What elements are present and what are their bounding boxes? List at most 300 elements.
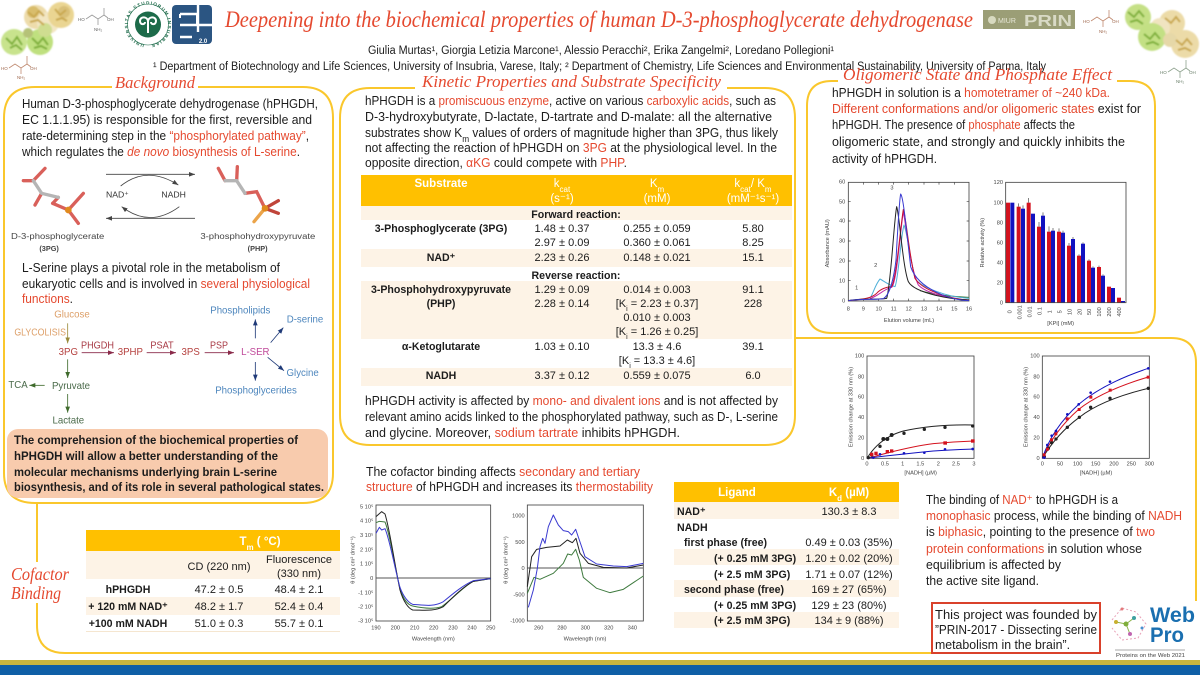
chart: elution profile: 9	[862, 306, 865, 312]
table: ligand dissociation constants: 134 ± 9 (88%)	[814, 615, 884, 627]
table header: (s⁻¹)	[550, 193, 574, 205]
chart: NADH low concentration: 60	[858, 395, 864, 401]
chart: far UV CD: 220	[429, 625, 438, 631]
panel: kinetic properties	[340, 72, 795, 445]
labels: reaction: NAD⁺	[106, 189, 129, 199]
text block: oligomeric state: Different conformations and/or oligomeric states exist for	[832, 101, 1142, 116]
chart: phosphate inhibition bars: 10	[1068, 309, 1074, 315]
chart: phosphate inhibition bars: Relative activity (%)	[980, 218, 986, 268]
chart: elution profile: 30	[839, 239, 845, 245]
text block: NAD and NADH binding: The binding of NAD⁺ to hPHGDH is a	[926, 492, 1119, 507]
chart: near UV CD	[504, 505, 643, 642]
table forward reaction: 5.80	[742, 223, 764, 235]
pathway: serine synthesis: 3PHP	[118, 347, 143, 358]
text block: NAD and NADH binding: monophasic process, while the binding of NADH	[926, 508, 1182, 523]
pathway: serine fates: Glycine	[287, 368, 319, 379]
diagram: metabolic pathway	[8, 305, 323, 426]
labels: reaction: D-3-phosphoglycerate	[11, 231, 105, 241]
table forward reaction: 0.255 ± 0.059	[623, 223, 691, 235]
callout: comprehension	[7, 429, 328, 498]
chart: far UV CD: 5 10⁵	[360, 503, 373, 510]
chart: phosphate inhibition bars: 20	[1078, 309, 1084, 315]
table reverse reaction: [Ki = 13.3 ± 4.6]	[619, 355, 695, 370]
chart: NADH low concentration: 2.5	[952, 462, 960, 468]
chart: elution profile	[825, 180, 972, 324]
table header: (mM⁻¹s⁻¹)	[727, 193, 779, 205]
text block: activity effects: hPHGDH activity is affected by mono- and divalent ions and is not affected by	[365, 393, 778, 408]
table forward reaction	[375, 209, 764, 264]
chart: NADH high concentration: 150	[1091, 462, 1100, 468]
panel outline: background	[4, 87, 333, 503]
charts: elution and phosphate activity	[825, 180, 1126, 327]
panel outline: cofactor	[37, 338, 1196, 653]
icon: serine molecule lower left: NH₂	[17, 75, 25, 80]
panel outline: kinetic	[340, 88, 795, 445]
chart: near UV CD: 1000	[512, 514, 525, 520]
chart: phosphate inhibition bars: 100	[1097, 307, 1103, 317]
chart: elution profile: Elution volume (mL)	[884, 318, 934, 324]
icon: serine molecule top left	[78, 8, 114, 32]
text block: NAD and NADH binding: equilibrium is affected by	[926, 557, 1061, 572]
table: melting temperatures: 47.2 ± 0.5	[195, 584, 243, 596]
pathway: pyruvate branch: Pyruvate	[52, 381, 90, 392]
chart: phosphate inhibition bars: 5	[1058, 310, 1064, 313]
table reverse reaction: 39.1	[742, 341, 764, 353]
table header: kcat/ Km	[734, 178, 772, 194]
table reverse reaction: Reverse reaction:	[532, 270, 620, 282]
table forward reaction: 8.25	[742, 237, 764, 249]
chart: far UV CD: 250	[486, 625, 495, 631]
icon: serine molecule lower right: OH	[1189, 70, 1196, 75]
pathway: pyruvate branch	[8, 359, 90, 426]
chart: NADH high concentration: 100	[1073, 462, 1082, 468]
chart: NADH low concentration: 0	[865, 462, 869, 468]
logo: Insubria university seal: UNIVERSITAS STUDIORUM INSUBRIAE	[124, 1, 172, 48]
chart: phosphate inhibition bars: 60	[997, 240, 1003, 246]
title: Deepening into the biochemical properties of human D-3-phosphoglycerate dehydrogenase	[224, 7, 973, 32]
pathway: glycolysis	[14, 309, 90, 343]
chart: NADH low concentration: 20	[858, 436, 864, 442]
chart: elution profile: 50	[839, 199, 845, 205]
logo: MIUR PRIN: PRIN	[1024, 13, 1072, 30]
table reverse reaction	[371, 270, 764, 382]
table reverse reaction: [Ki = 1.26 ± 0.25]	[616, 326, 698, 340]
pathway: pyruvate branch: Lactate	[52, 415, 84, 426]
chart: NADH low concentration: 40	[858, 415, 864, 421]
wordmark	[1115, 604, 1195, 659]
pathway: serine synthesis: PSP	[210, 341, 228, 352]
table header: Substrate	[414, 178, 468, 190]
table reverse reaction: 1.03 ± 0.10	[535, 341, 589, 353]
table: kinetic parameters	[361, 175, 792, 386]
text block: NAD and NADH binding: the active site ligand.	[926, 573, 1039, 588]
table: ligand dissociation constants: (+ 2.5 mM 3PG)	[714, 569, 790, 581]
table: melting temperatures: 51.0 ± 0.3	[195, 618, 243, 630]
table: melting temperatures: 55.7 ± 0.1	[275, 618, 323, 630]
chart: elution profile: 0	[842, 298, 845, 304]
chart: phosphate inhibition bars: 40	[997, 260, 1003, 266]
chart: elution profile: 10	[839, 278, 845, 284]
table: ligand dissociation constants: NADH	[677, 522, 708, 534]
icon: serine molecule top right: HO	[1083, 19, 1090, 24]
text block: oligomeric state: hPHGDH. The presence of phosphate affects the	[832, 117, 1075, 132]
chart: phosphate inhibition bars: 80	[997, 220, 1003, 226]
chart: NADH low concentration: 80	[858, 374, 864, 380]
chart: phosphate inhibition bars: 20	[997, 280, 1003, 286]
text block: NAD and NADH binding	[926, 492, 1182, 588]
chart: far UV CD: Wavelength (nm)	[412, 636, 455, 642]
chart: far UV CD: 2 10⁵	[360, 546, 373, 553]
text block: hPHGDH introduction: Human D-3-phosphoglycerate dehydrogenase (hPHGDH,	[22, 96, 318, 111]
chart: elution profile: 2	[874, 263, 877, 269]
chart: elution profile: 15	[951, 306, 957, 312]
text block: substrate promiscuity	[365, 93, 778, 170]
chart: NADH low concentration: 2	[937, 462, 940, 468]
chart: near UV CD: -1000	[510, 619, 525, 625]
text block: secondary and tertiary structure	[366, 464, 653, 494]
panel: cofactor binding	[11, 338, 1196, 653]
table: melting temperatures: CD (220 nm)	[188, 561, 250, 573]
text block: substrate promiscuity: opposite direction, αKG could compete with PHP.	[365, 155, 627, 170]
table: ligand dissociation constants: (+ 0.25 mM 3PG)	[714, 553, 796, 565]
chart: phosphate inhibition bars: 0	[1000, 300, 1003, 306]
chart: far UV CD: -3 10⁵	[358, 618, 373, 625]
text block: hPHGDH introduction	[21, 96, 318, 159]
chart: NADH high concentration: 20	[1033, 436, 1040, 442]
chart: phosphate inhibition bars: 100	[994, 200, 1003, 206]
heading: cofactor binding: Cofactor	[11, 564, 70, 584]
charts: circular dichroism	[351, 503, 643, 642]
chart: elution profile: 40	[839, 219, 845, 225]
logo: Web Pro	[1112, 604, 1195, 659]
callout: funding: ”PRIN-2017 - Dissecting serine	[935, 622, 1097, 637]
chart: near UV CD: 500	[515, 540, 525, 546]
table: ligand dissociation constants: 169 ± 27 (65%)	[811, 584, 887, 596]
panel outline: oligomeric	[807, 81, 1155, 333]
table: ligand dissociation constants: 0.49 ± 0.03 (35%)	[805, 537, 893, 549]
chart: far UV CD: 230	[448, 625, 458, 631]
chart: NADH high concentration: Emission change at 330 nm (%)	[1024, 367, 1030, 447]
chart: far UV CD: 3 10⁵	[360, 532, 373, 539]
text block: hPHGDH introduction: rate-determining step in the “phosphorylated pathway”,	[22, 128, 309, 143]
chart: near UV CD: -500	[513, 592, 525, 598]
affiliations: ¹ Department of Biotechnology and Life Sciences, University of Insubria, Varese, Italy; ² Department of Chemistry, Life Sciences and Environmental Sustainability, University of Parma, Italy	[153, 61, 1046, 73]
diagram: 3PG to PHP reaction	[11, 167, 316, 253]
table: melting temperatures: Fluorescence	[266, 554, 332, 566]
chart: NADH high concentration: 250	[1127, 462, 1136, 468]
text block: oligomeric state: activity of hPHGDH.	[832, 151, 937, 166]
chart: elution profile: 3	[890, 185, 894, 191]
chart: NADH high concentration: [NADH] (µM)	[1080, 471, 1112, 477]
chart: NADH high concentration: 300	[1145, 462, 1154, 468]
heading: kinetic properties: Kinetic Properties and Substrate Specificity	[421, 72, 721, 91]
chart: NADH low concentration	[848, 354, 976, 477]
wordmark: Proteins on the Web 2021	[1116, 653, 1185, 659]
table reverse reaction: 0.010 ± 0.003	[623, 312, 691, 324]
pathway: glycolysis: GLYCOLISIS	[14, 328, 66, 339]
text block: oligomeric state: oligomeric state, and strongly and quickly inhibits the	[832, 134, 1125, 149]
wordmark: Web	[1150, 604, 1195, 627]
chart: NADH high concentration: 0	[1037, 456, 1040, 462]
pathway: glycolysis: Glucose	[54, 309, 90, 320]
chart: phosphate inhibition bars: 0	[1008, 310, 1014, 313]
pathway: serine synthesis: PSAT	[150, 341, 174, 352]
chart: elution profile: 16	[966, 306, 972, 312]
chart: NADH low concentration: 1	[901, 462, 904, 468]
chart: far UV CD: θ (deg cm² dmol⁻¹)	[351, 536, 357, 584]
chart: elution profile: 12	[906, 306, 912, 312]
table forward reaction: 2.23 ± 0.26	[535, 252, 589, 264]
chart: far UV CD: 0	[370, 576, 373, 582]
text block: L-serine role: functions.	[22, 291, 73, 306]
table: ligand dissociation constants: 1.71 ± 0.07 (12%)	[805, 569, 893, 581]
icon: serine molecule lower left: OH	[30, 66, 37, 71]
chart: phosphate inhibition bars: 120	[994, 180, 1003, 186]
table: melting temperatures: 48.2 ± 1.7	[195, 601, 243, 613]
table: ligand dissociation constants: Kd (µM)	[829, 487, 869, 502]
chart: phosphate inhibition bars: [KPi] (mM)	[1047, 321, 1074, 327]
labels: reaction: (PHP)	[248, 244, 268, 253]
pathway: pyruvate branch: TCA	[8, 380, 28, 391]
table forward reaction: 2.97 ± 0.09	[535, 237, 589, 249]
chart: NADH high concentration: 200	[1109, 462, 1119, 468]
chart: phosphate inhibition bars: 50	[1087, 309, 1093, 315]
icon: serine molecule top right: OH	[1112, 19, 1119, 24]
chart: near UV CD: 260	[534, 625, 543, 631]
panel: background	[4, 73, 333, 503]
table reverse reaction: [Ki = 2.23 ± 0.37]	[616, 298, 698, 312]
callout: comprehension: hPHGDH will allow a better understanding of the	[14, 449, 278, 463]
chart: elution profile: 60	[839, 180, 845, 186]
chart: near UV CD: Wavelength (nm)	[564, 636, 607, 642]
text block: secondary and tertiary structure: The cofactor binding affects secondary and tertiary	[366, 464, 640, 479]
table forward reaction: 3-Phosphoglycerate (3PG)	[375, 223, 507, 235]
table: melting temperatures: +100 mM NADH	[89, 618, 167, 630]
table: ligand dissociation constants: second phase (free)	[684, 584, 784, 596]
chart: NADH high concentration: 0	[1041, 462, 1044, 468]
footer band	[0, 660, 1200, 675]
chart: near UV CD: θ (deg cm² dmol⁻¹)	[504, 536, 510, 584]
chart: far UV CD: 240	[467, 625, 477, 631]
table: melting temperatures: + 120 mM NAD⁺	[88, 601, 168, 613]
table: ligand dissociation constants: (+ 2.5 mM 3PG)	[714, 615, 790, 627]
chart: NADH low concentration: 0	[861, 456, 864, 462]
logo: MIUR PRIN	[983, 10, 1075, 30]
callout: funding: This project was founded by	[935, 607, 1098, 622]
table reverse reaction: (PHP)	[427, 298, 455, 310]
text block: L-serine role	[22, 260, 310, 306]
chart: NADH low concentration: 1.5	[916, 462, 924, 468]
text block: substrate promiscuity: hPHGDH is a promiscuous enzyme, active on various carboxylic acids, such as	[365, 93, 776, 108]
chart: elution profile: Absorbance (mAU)	[825, 219, 831, 267]
chart: phosphate inhibition bars: 200	[1107, 307, 1113, 317]
pathway: serine synthesis: 3PG	[59, 347, 78, 358]
table: ligand dissociation constants: 129 ± 23 (80%)	[811, 600, 887, 612]
table reverse reaction: 228	[744, 298, 762, 310]
callout: comprehension: The comprehension of the biochemical properties of	[14, 433, 299, 447]
callout: funding: metabolism in the brain”.	[935, 637, 1070, 652]
text block: hPHGDH introduction: EC 1.1.1.95) is responsible for the first, reversible and	[22, 112, 312, 127]
table forward reaction: NAD⁺	[427, 252, 456, 264]
icon: protein structure top left	[1, 2, 74, 55]
chart: NADH low concentration: Emission change at 330 nm (%)	[848, 367, 854, 447]
wordmark: Pro	[1150, 624, 1184, 647]
table header: kcat	[554, 178, 571, 194]
table reverse reaction: 2.28 ± 0.14	[535, 298, 589, 310]
table: ligand dissociation constants: (+ 0.25 mM 3PG)	[714, 600, 796, 612]
icon: serine molecule lower right: HO	[1160, 70, 1167, 75]
chart: NADH high concentration: 80	[1033, 374, 1040, 380]
text block: activity effects: relevant amino acids linked to the phosphorylated pathway, such as D-, L-serine	[365, 409, 778, 424]
chart: NADH high concentration: 100	[1030, 354, 1040, 360]
panel: oligomeric state	[807, 65, 1155, 333]
table: melting temperatures: Tm ( °C)	[239, 536, 281, 552]
chart: elution profile: 14	[936, 306, 942, 312]
chart: phosphate inhibition bars: 0.01	[1028, 306, 1034, 317]
text block: substrate promiscuity: not affecting the reaction of hPHGDH on 3PG at the physiological level. In the	[365, 140, 777, 155]
callout: comprehension: molecular mechanisms underlying brain L-serine	[14, 465, 277, 479]
text block: oligomeric state	[832, 85, 1142, 166]
chart: phosphate inhibition bars: 1	[1048, 310, 1054, 313]
chart: far UV CD	[351, 503, 495, 642]
table: ligand dissociation constants: 1.20 ± 0.02 (20%)	[805, 553, 893, 565]
table reverse reaction: 3-Phosphohydroxypyruvate	[371, 284, 511, 296]
chart: NADH high concentration: 40	[1033, 415, 1040, 421]
icon: serine molecule top right: NH₂	[1099, 29, 1107, 34]
pathway: serine fates: Phosphoglycerides	[215, 385, 297, 396]
chart: NADH high concentration	[1024, 354, 1154, 477]
chart: NADH high concentration: 50	[1057, 462, 1063, 468]
logo: MIUR PRIN: MIUR	[998, 18, 1016, 25]
table reverse reaction: 1.29 ± 0.09	[535, 284, 589, 296]
table: ligand dissociation constants	[674, 482, 899, 628]
chart: elution profile: 13	[921, 306, 927, 312]
text block: substrate promiscuity: D-3-hydroxybutyrate, D-lactate, D-tartrate and D-malate: all the alternative	[365, 109, 772, 124]
table rows	[361, 175, 792, 386]
icon: serine molecule top left: NH₂	[94, 27, 102, 32]
table reverse reaction: 0.559 ± 0.075	[623, 370, 691, 382]
labels: reaction: 3-phosphohydroxypyruvate	[200, 231, 316, 241]
chart: elution profile: 20	[839, 259, 845, 265]
table reverse reaction: 13.3 ± 4.6	[633, 341, 681, 353]
table: ligand dissociation constants: first phase (free)	[684, 537, 767, 549]
labels: reaction: (3PG)	[39, 244, 59, 253]
chart: elution profile: 10	[876, 306, 882, 312]
table: melting temperatures: hPHGDH	[106, 584, 150, 596]
chart: far UV CD: 1 10⁵	[360, 561, 373, 568]
icon: serine molecule top right	[1083, 10, 1119, 34]
pathway: serine synthesis	[59, 341, 270, 358]
heading: oligomeric state: Oligomeric State and Phosphate Effect	[843, 65, 1113, 84]
callout: comprehension: biosynthesis, and of its role in several pathological states.	[14, 480, 324, 494]
text block: NAD and NADH binding: protein conformations in solution whose	[926, 541, 1142, 556]
icon: serine molecule top left: HO	[78, 17, 85, 22]
table: ligand dissociation constants: Ligand	[718, 487, 756, 499]
table forward reaction: 0.148 ± 0.021	[623, 252, 691, 264]
chart: NADH low concentration: [NADH] (µM)	[904, 471, 937, 477]
icon: serine molecule lower left: HO	[1, 66, 8, 71]
icon: protein structure top right	[1125, 4, 1199, 58]
chart: far UV CD: 210	[410, 625, 419, 631]
chart: NADH low concentration: 3	[972, 462, 976, 468]
logo: PH 2.0	[172, 5, 212, 45]
table reverse reaction: α-Ketoglutarate	[402, 341, 480, 353]
icon: serine molecule lower right: NH₂	[1176, 79, 1184, 84]
icon: serine molecule lower right	[1160, 60, 1196, 84]
table: melting temperatures: (330 nm)	[277, 568, 321, 580]
chart: far UV CD: 4 10⁵	[360, 518, 373, 525]
callout: funding	[932, 603, 1100, 653]
chart: phosphate inhibition bars: 0.1	[1038, 307, 1044, 315]
chart: elution profile: 8	[847, 306, 850, 312]
chart: near UV CD: 320	[604, 625, 613, 631]
chart: elution profile: 11	[891, 306, 897, 312]
table header: (mM)	[644, 193, 671, 205]
table reverse reaction: 3.37 ± 0.12	[535, 370, 589, 382]
authors: Giulia Murtas¹, Giorgia Letizia Marcone¹, Alessio Peracchi², Erika Zangelmi², Loredano Pollegioni¹	[368, 45, 834, 57]
chart: phosphate inhibition bars	[980, 180, 1126, 327]
icon: serine molecule lower left	[1, 56, 37, 80]
table reverse reaction: 6.0	[745, 370, 761, 382]
heading: background: Background	[115, 73, 195, 92]
pathway: serine synthesis: 3PS	[182, 347, 200, 358]
text block: L-serine role: eukaryotic cells and is involved in several physiological	[22, 276, 310, 291]
chart: phosphate inhibition bars: 400	[1117, 307, 1123, 317]
pathway: serine fates	[210, 305, 323, 396]
chart: near UV CD: 0	[522, 566, 525, 572]
chart: NADH low concentration: 0.5	[881, 462, 889, 468]
chart: near UV CD: 340	[628, 625, 637, 631]
icon: network sphere	[1112, 608, 1146, 640]
labels: reaction: NADH	[161, 189, 186, 199]
table: melting temperatures: 48.4 ± 2.1	[275, 584, 323, 596]
table header: Km	[650, 178, 664, 194]
pathway: serine synthesis: PHGDH	[81, 341, 114, 352]
table forward reaction: Forward reaction:	[531, 209, 621, 221]
chart: elution profile: 1	[855, 285, 858, 291]
chart: far UV CD: -1 10⁵	[358, 589, 373, 596]
chart: near UV CD: 280	[557, 625, 567, 631]
table: melting temperatures: 52.4 ± 0.4	[275, 601, 323, 613]
chart: NADH low concentration: 100	[855, 354, 864, 360]
logo: PH 2.0: 2.0	[199, 39, 208, 45]
chart: far UV CD: -2 10⁵	[358, 604, 373, 611]
pathway: serine fates: Phospholipids	[210, 305, 271, 316]
text block: NAD and NADH binding: is biphasic, pointing to the presence of two	[926, 524, 1155, 539]
pathway: serine fates: D-serine	[287, 314, 323, 325]
table reverse reaction: NADH	[426, 370, 456, 382]
heading: cofactor binding	[11, 564, 70, 603]
table: melting temperatures	[86, 530, 340, 632]
table reverse reaction: 91.1	[742, 284, 764, 296]
heading: cofactor binding: Binding	[11, 583, 61, 603]
text block: substrate promiscuity: substrates show Km values of orders of magnitude higher than 3PG, thus likely	[365, 125, 778, 144]
table reverse reaction: 0.014 ± 0.003	[623, 284, 691, 296]
text block: oligomeric state: hPHGDH in solution is a homotetramer of ~240 kDa.	[832, 85, 1110, 100]
chart: far UV CD: 200	[391, 625, 400, 631]
table forward reaction: 0.360 ± 0.061	[623, 237, 691, 249]
table: ligand dissociation constants: 130.3 ± 8.3	[822, 506, 876, 518]
pathway: serine synthesis: L-SER	[241, 347, 270, 358]
chart: phosphate inhibition bars: 0.001	[1018, 305, 1024, 319]
table forward reaction: 1.48 ± 0.37	[535, 223, 589, 235]
labels: reaction	[11, 189, 316, 253]
table header	[414, 178, 779, 205]
icon: 3PG molecule	[23, 168, 83, 223]
charts: NADH titration	[848, 354, 1154, 477]
text block: secondary and tertiary structure: structure of hPHGDH and increases its thermostability	[366, 479, 653, 494]
chart: near UV CD: 300	[581, 625, 590, 631]
